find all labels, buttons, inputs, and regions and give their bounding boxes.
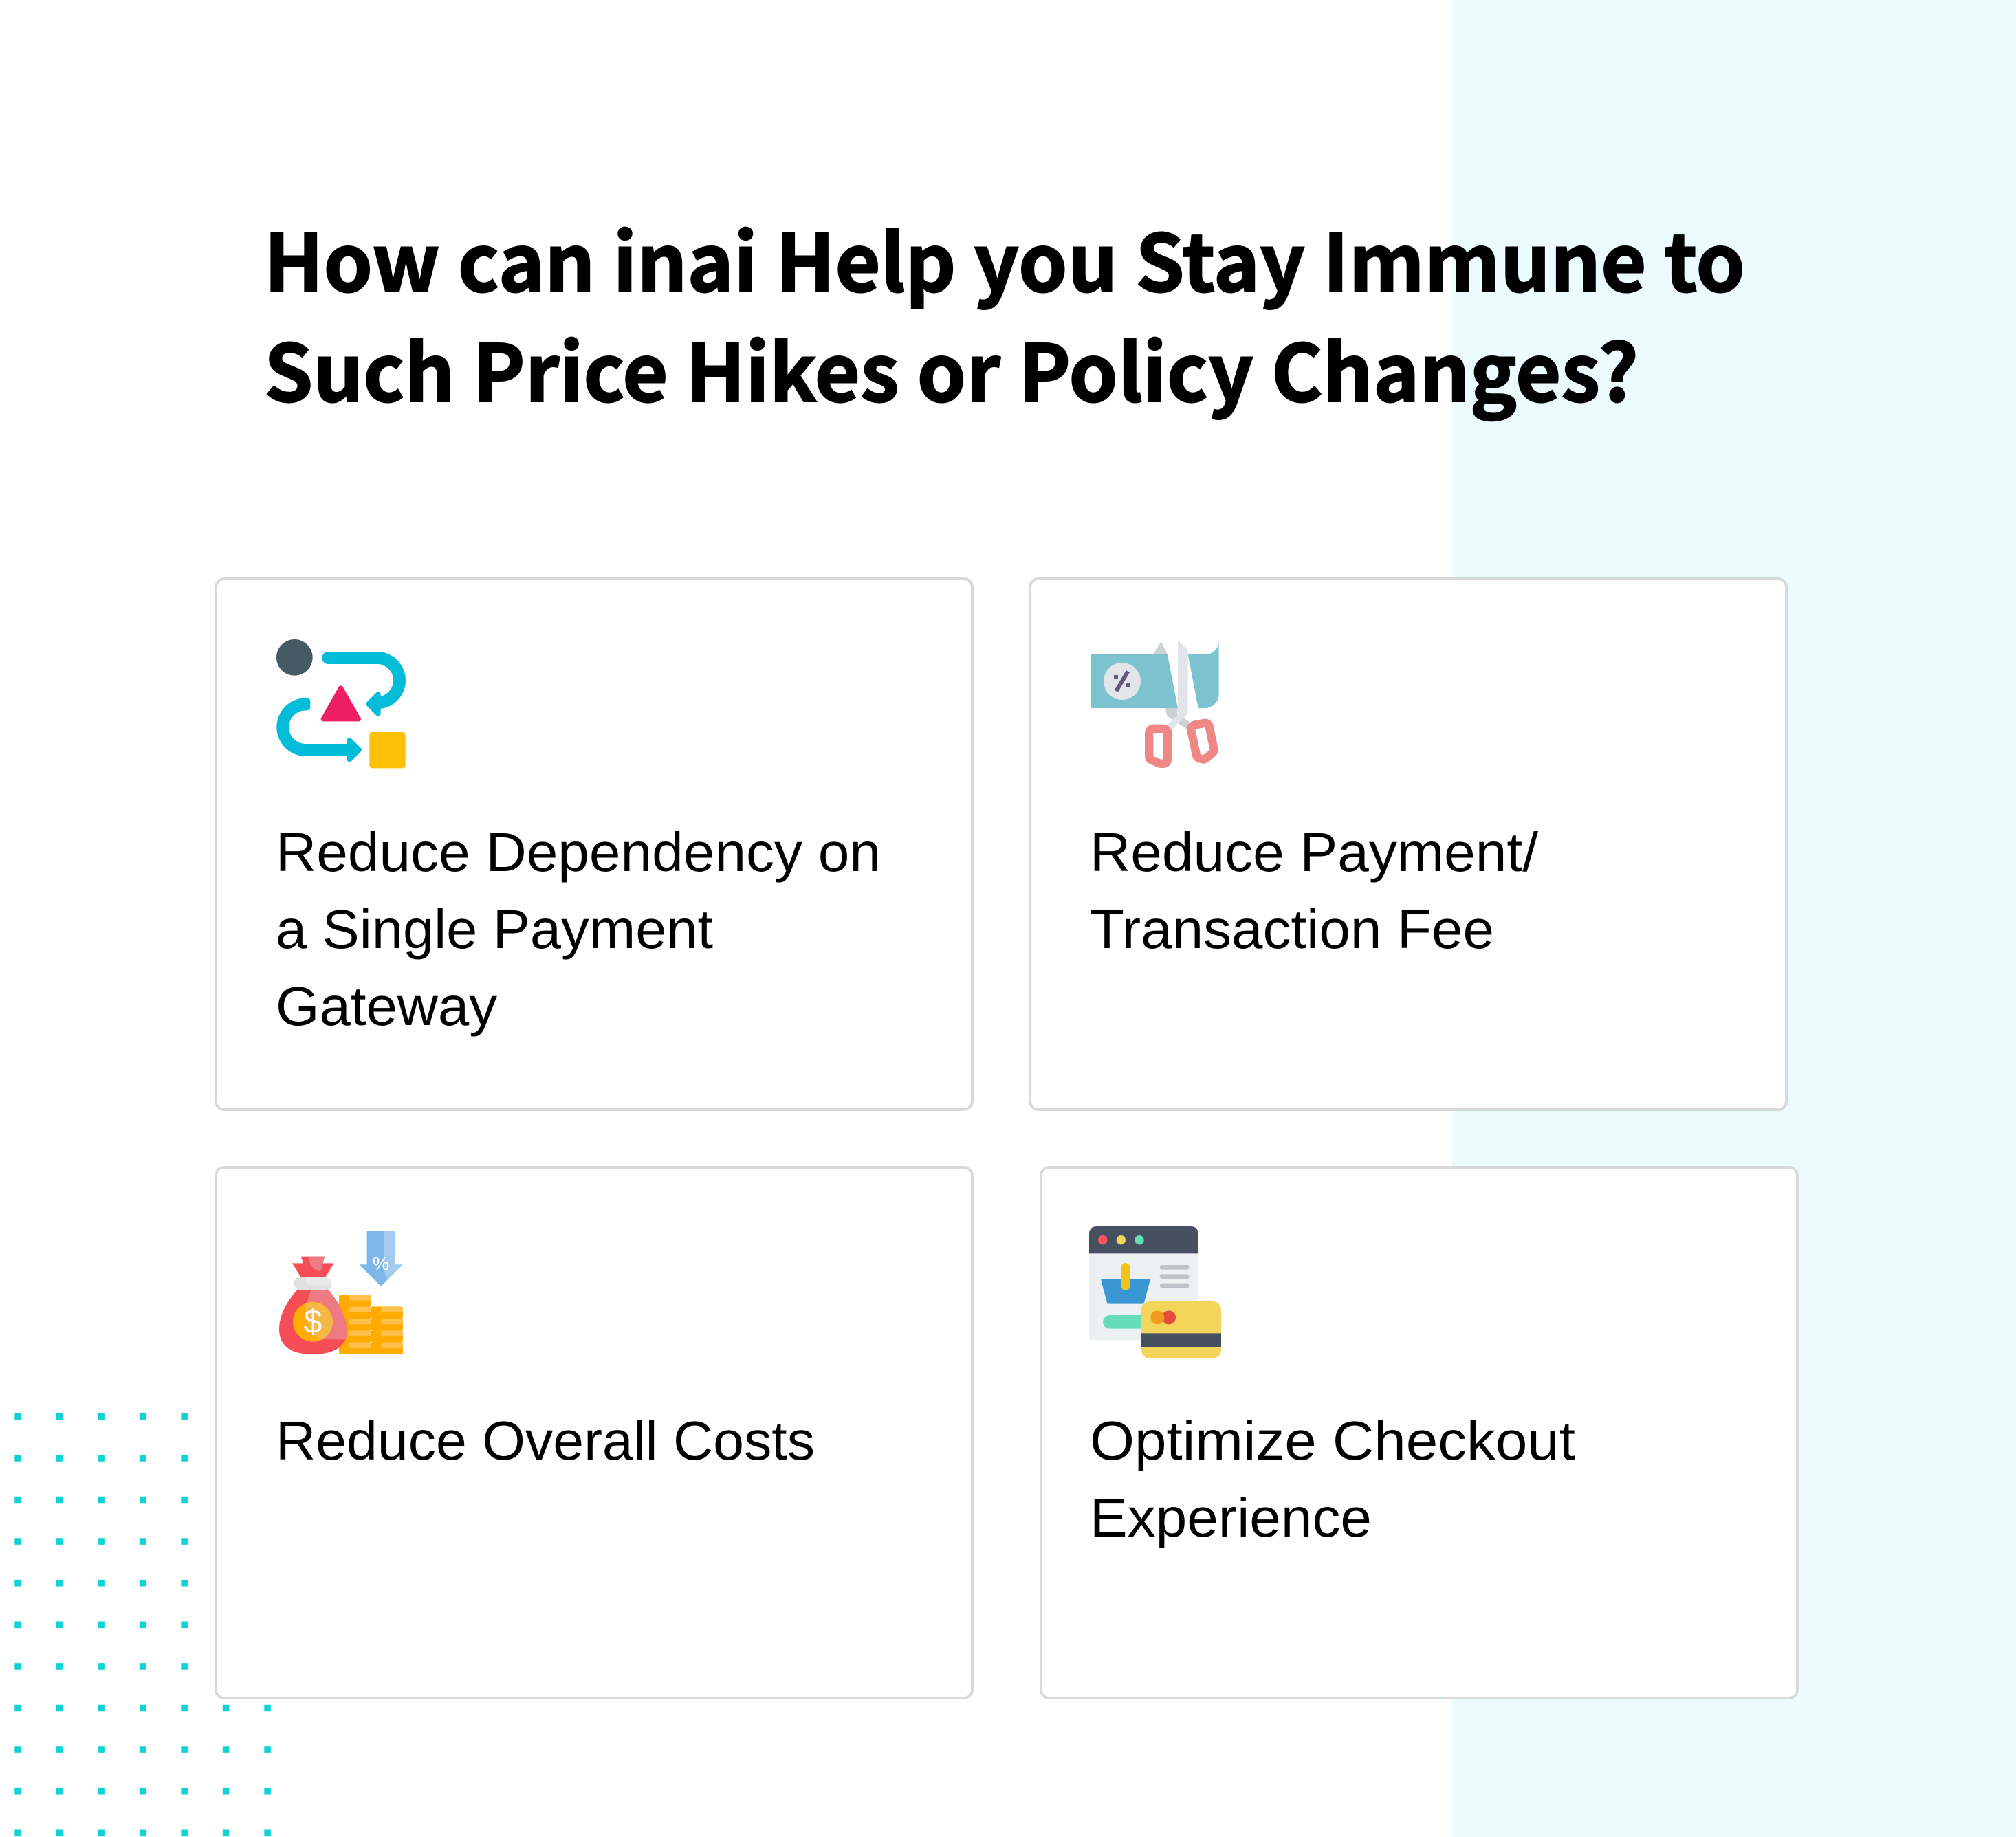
text: reduce fee: Transaction Fee [1090,899,1494,960]
text: reduce dependency: a Single Payment [276,899,713,960]
panel: reduce fee [1030,579,1786,1110]
title: Such Price Hikes or Policy Changes? [264,311,1639,425]
background panel: light blue [1452,0,2016,1837]
icon: scissors cutting a coupon [1091,640,1219,760]
text: reduce dependency: Reduce Dependency on [276,822,881,883]
text: optimize checkout [1090,1410,1575,1548]
icon: money bag, coins and down arrow [279,1231,403,1354]
text: optimize checkout: Optimize Checkout [1090,1410,1575,1471]
icon: checkout window and card [1089,1226,1221,1358]
text: reduce costs: Reduce Overall Costs [276,1410,815,1471]
text: reduce dependency: Gateway [276,976,497,1037]
dot pattern [14,1414,271,1836]
text: reduce fee: Reduce Payment/ [1090,822,1539,883]
panel: reduce costs [216,1167,972,1698]
icon: shapes and flow arrows [276,639,406,768]
icon: money bag, coins and down arrow: % [373,1253,389,1274]
title: How can inai Help you Stay Immune to [264,201,1745,315]
text: reduce dependency [276,822,881,1037]
icon: money bag, coins and down arrow: $ [304,1303,322,1340]
text: reduce fee [1090,822,1539,960]
panel: reduce dependency [216,579,972,1110]
title [264,201,1745,425]
text: optimize checkout: Experience [1090,1487,1372,1548]
panel: optimize checkout [1041,1167,1797,1698]
